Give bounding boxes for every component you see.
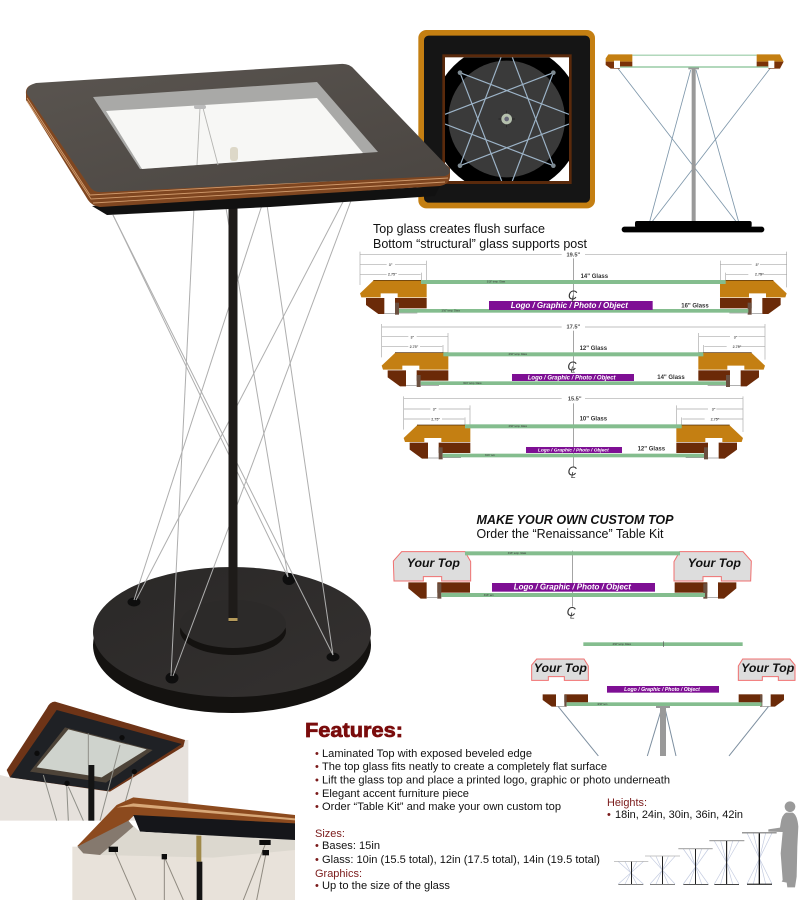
text: sizes and graphics bbox=[315, 828, 600, 892]
section: 19.5 inch: 3" bbox=[389, 263, 393, 267]
section: 19.5 inch: L bbox=[571, 294, 576, 304]
base feet bbox=[128, 573, 340, 684]
diagram: exploded kit view: Your Top bbox=[534, 661, 587, 675]
diagram: cross sections with dimensions bbox=[360, 252, 787, 480]
text: heights: Heights: bbox=[607, 797, 647, 809]
photo: closeup of beveled edge bbox=[72, 797, 295, 900]
table 30in bbox=[678, 848, 713, 885]
section: 17.5 inch: 12" Glass bbox=[580, 346, 608, 352]
section: 17.5 inch: Logo / Graphic / Photo / Object bbox=[528, 376, 617, 382]
text: sizes and graphics: Up to the size of the glass bbox=[322, 880, 450, 892]
section: 15.5 inch: 3" bbox=[433, 408, 437, 412]
section: 15.5 inch: 10" Glass bbox=[580, 416, 608, 422]
diagram: custom top cross section: Your Top bbox=[407, 556, 460, 570]
section: 15.5 inch bbox=[404, 396, 743, 480]
section: 19.5 inch: 2.75" bbox=[755, 273, 764, 277]
diagram: exploded kit view bbox=[532, 641, 795, 756]
heading: make your own custom top bbox=[476, 513, 674, 541]
caption: glass note: Top glass creates flush surface bbox=[373, 222, 545, 236]
section: 17.5 inch: 3/16" temp. Glass bbox=[463, 382, 482, 385]
diagram: custom top cross section: 3/16" tem bbox=[484, 594, 494, 597]
section: 19.5 inch: Logo / Graphic / Photo / Object bbox=[511, 301, 628, 310]
section: 15.5 inch: L bbox=[571, 470, 576, 480]
central post bbox=[228, 205, 238, 622]
chart: table height comparison bbox=[614, 801, 798, 887]
section: 19.5 inch: 19.5" bbox=[566, 252, 580, 258]
section: 17.5 inch bbox=[382, 324, 765, 387]
section: 19.5 inch: C bbox=[568, 288, 578, 302]
section: 17.5 inch: 3" bbox=[734, 335, 738, 339]
section: 15.5 inch: 3/16" tem bbox=[485, 454, 495, 457]
section: 15.5 inch: 15.5" bbox=[568, 396, 582, 402]
diagram: custom top cross section: L bbox=[570, 610, 575, 620]
diagram: exploded kit view: 3/16" temp. Glass bbox=[612, 643, 632, 646]
text: sizes and graphics: • bbox=[315, 840, 319, 852]
section: 15.5 inch: 12" Glass bbox=[638, 447, 666, 453]
list: features: • bbox=[315, 761, 319, 773]
section: 17.5 inch: 14" Glass bbox=[657, 375, 685, 381]
section: 15.5 inch: 3/16" temp. Glass bbox=[508, 425, 528, 428]
text: heights: • bbox=[607, 809, 611, 821]
diagram: custom top cross section bbox=[393, 551, 751, 620]
list: features: • bbox=[315, 748, 319, 760]
section: 15.5 inch: Logo / Graphic / Photo / Object bbox=[538, 448, 609, 454]
list: features: Lift the glass top and place a printed logo, graphic or photo underneath bbox=[322, 774, 670, 786]
heading: features: Features: bbox=[305, 720, 403, 742]
text: sizes and graphics: • bbox=[315, 854, 319, 866]
table 18in bbox=[614, 861, 648, 885]
section: 19.5 inch: 16" Glass bbox=[681, 303, 709, 309]
section: 17.5 inch: 17.5" bbox=[566, 325, 580, 331]
list: features: Laminated Top with exposed beveled edge bbox=[322, 748, 532, 760]
section: 17.5 inch: 3" bbox=[410, 335, 414, 339]
section: 19.5 inch: 3/16" temp. Glass bbox=[441, 310, 461, 313]
heading: make your own custom top: Order the “Renaissance” Table Kit bbox=[476, 527, 664, 541]
section: 19.5 inch: 14" Glass bbox=[581, 274, 609, 280]
diagram: exploded kit view: Your Top bbox=[741, 661, 795, 675]
table 24in bbox=[645, 856, 680, 885]
list: features: Elegant accent furniture piece bbox=[322, 788, 469, 800]
table 36in bbox=[709, 840, 744, 885]
caption: glass note bbox=[373, 222, 588, 251]
section: 15.5 inch: 2.75" bbox=[431, 417, 440, 421]
list: features: • bbox=[315, 801, 319, 813]
diagram: custom top cross section: 3/16" temp. Glass bbox=[508, 552, 527, 555]
list: features: Order “Table Kit” and make your own custom top bbox=[322, 801, 561, 813]
list: features: The top glass fits neatly to create a completely flat surface bbox=[322, 761, 607, 773]
diagram: top view of table bbox=[418, 30, 595, 208]
text: sizes and graphics: Sizes: bbox=[315, 828, 345, 840]
section: 15.5 inch: 2.75" bbox=[711, 417, 720, 421]
caption: glass note: Bottom “structural” glass supports post bbox=[373, 237, 588, 251]
section: 19.5 inch: 2.75" bbox=[388, 273, 397, 277]
center line bbox=[572, 258, 574, 467]
list: features: • bbox=[315, 774, 319, 786]
section: 19.5 inch bbox=[360, 252, 787, 315]
round base bbox=[93, 567, 371, 713]
text: heights: 18in, 24in, 30in, 36in, 42in bbox=[615, 809, 743, 821]
text: sizes and graphics: Bases: 15in bbox=[322, 840, 380, 852]
photo: underside of table top bbox=[0, 702, 188, 821]
diagram: custom top cross section: Logo / Graphic / Photo / Object bbox=[514, 583, 631, 592]
diagram: custom top cross section: C bbox=[567, 605, 577, 619]
list: features: • bbox=[315, 788, 319, 800]
section: 15.5 inch: C bbox=[568, 465, 578, 479]
list: features bbox=[315, 748, 670, 813]
photo: assembled table bbox=[26, 64, 450, 713]
section: 19.5 inch: 3/16" temp. Glass bbox=[487, 281, 506, 284]
icon: person silhouette bbox=[768, 801, 798, 887]
text: sizes and graphics: • bbox=[315, 880, 319, 892]
diagram: exploded kit view: Logo / Graphic / Photo / Object bbox=[624, 687, 700, 693]
diagram: exploded kit view: 3/16" tem bbox=[597, 703, 607, 706]
section: 17.5 inch: C bbox=[567, 359, 577, 373]
section: 17.5 inch: 2.75" bbox=[733, 345, 742, 349]
table 42in bbox=[742, 832, 777, 885]
table top bbox=[26, 64, 450, 215]
text: heights bbox=[607, 797, 743, 821]
tension wires bbox=[113, 198, 352, 676]
text: sizes and graphics: Graphics: bbox=[315, 868, 362, 880]
heading: make your own custom top: MAKE YOUR OWN CUSTOM TOP bbox=[476, 513, 674, 527]
section: 17.5 inch: 3/16" temp. Glass bbox=[508, 353, 528, 356]
text: sizes and graphics: Glass: 10in (15.5 total), 12in (17.5 total), 14in (19.5 total) bbox=[322, 854, 600, 866]
section: 19.5 inch: 3" bbox=[755, 263, 759, 267]
section: 17.5 inch: 2.75" bbox=[410, 345, 419, 349]
section: 15.5 inch: 3" bbox=[712, 408, 716, 412]
diagram: side view of table bbox=[606, 54, 784, 232]
diagram: custom top cross section: Your Top bbox=[688, 556, 741, 570]
section: 17.5 inch: L bbox=[571, 365, 576, 375]
